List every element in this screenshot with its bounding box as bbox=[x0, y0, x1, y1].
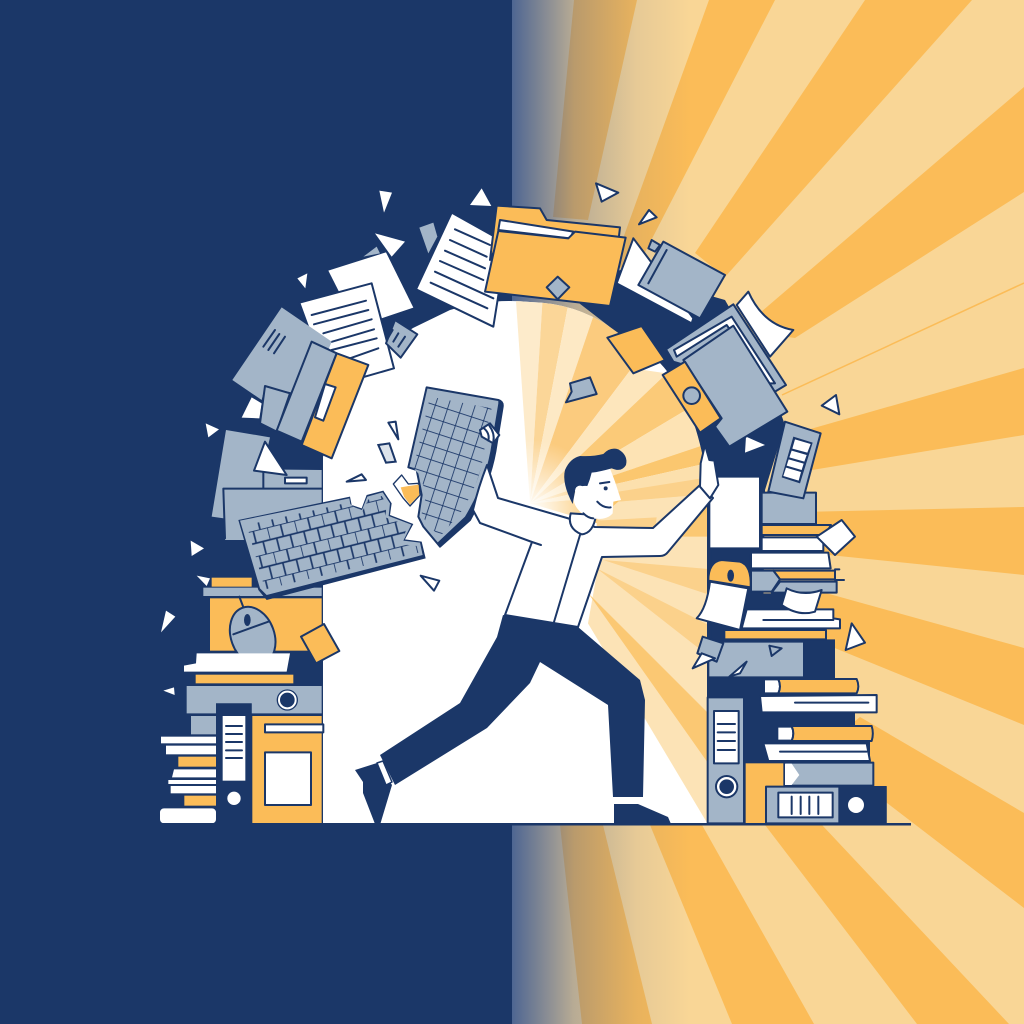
big grey folder bbox=[666, 304, 787, 447]
grey binder bbox=[708, 697, 744, 823]
upright grey book bbox=[768, 422, 821, 498]
man lifting the arch bbox=[355, 445, 718, 825]
rays beside and below the arm bbox=[588, 478, 707, 822]
curved white paper bbox=[737, 292, 793, 357]
note with orange mouse bbox=[697, 560, 751, 630]
debris triangles, top right bbox=[596, 183, 839, 453]
grey paper fragment bbox=[566, 377, 597, 402]
facial features bbox=[583, 482, 611, 518]
arc of dark backing behind the flying objects bbox=[575, 270, 785, 825]
plain sheet of paper bbox=[328, 252, 413, 327]
head bbox=[564, 449, 626, 534]
hand gripping keyboard bbox=[480, 423, 499, 443]
grey box with ring bbox=[187, 686, 322, 734]
background: sunburst half bbox=[512, 0, 1024, 1024]
neck bbox=[570, 513, 596, 534]
orange binder bbox=[252, 716, 323, 823]
ruled paper, left bbox=[299, 283, 394, 387]
triangles and shards, right stack bbox=[693, 623, 865, 677]
shirt with arms bbox=[473, 465, 713, 627]
shoes and cuffs bbox=[355, 761, 671, 825]
tall white sheet bbox=[709, 477, 760, 548]
flying keyboards and shards bbox=[238, 387, 503, 600]
debris triangles, left bbox=[161, 541, 210, 695]
pants bbox=[380, 615, 645, 797]
lower books bbox=[760, 679, 877, 786]
shirt placket bbox=[532, 535, 580, 622]
top arc: flying folders bbox=[485, 183, 839, 498]
upper books bbox=[751, 493, 844, 593]
shards near break bbox=[347, 422, 439, 591]
stacked boxes bbox=[203, 578, 322, 651]
grey envelope bbox=[232, 307, 332, 400]
grey folder top right bbox=[638, 240, 725, 318]
star burst at break bbox=[393, 475, 420, 506]
paper note, right bbox=[817, 520, 855, 555]
book pile, left bbox=[160, 737, 216, 823]
upright keyboard half bbox=[408, 387, 503, 547]
white sheet behind grey folder bbox=[617, 238, 693, 323]
dark backing of stack bbox=[708, 548, 887, 823]
white shard under folder bbox=[242, 397, 262, 418]
horizontal box with label bbox=[766, 786, 887, 823]
books under mouse bbox=[184, 653, 293, 683]
raised hand, right bbox=[700, 445, 718, 498]
navy binder bbox=[216, 703, 252, 823]
left column: falling papers and folders bbox=[206, 188, 507, 540]
open folder with orange spine bbox=[260, 342, 368, 458]
left column: books and binders bbox=[160, 541, 339, 823]
orange sticky note bbox=[301, 624, 339, 663]
small grey card bbox=[386, 320, 417, 358]
paper note, centre bbox=[782, 588, 822, 613]
hair bbox=[564, 449, 626, 504]
icon: orange file folder bbox=[485, 206, 626, 306]
horizontal keyboard half bbox=[238, 491, 426, 600]
orange binder, arc bbox=[663, 362, 721, 433]
debris triangles, upper left bbox=[206, 188, 491, 437]
ground line bbox=[160, 823, 911, 826]
orange sticky note, arc bbox=[607, 326, 665, 373]
right column: books and binders bbox=[693, 477, 887, 823]
face bbox=[573, 467, 621, 519]
mid books bbox=[708, 609, 840, 677]
icon: mouse bbox=[222, 597, 283, 672]
grey box stack top bbox=[212, 430, 322, 540]
ruled paper, top bbox=[416, 213, 507, 327]
ear bbox=[575, 486, 585, 496]
arch interior with inner rays bbox=[323, 301, 707, 823]
